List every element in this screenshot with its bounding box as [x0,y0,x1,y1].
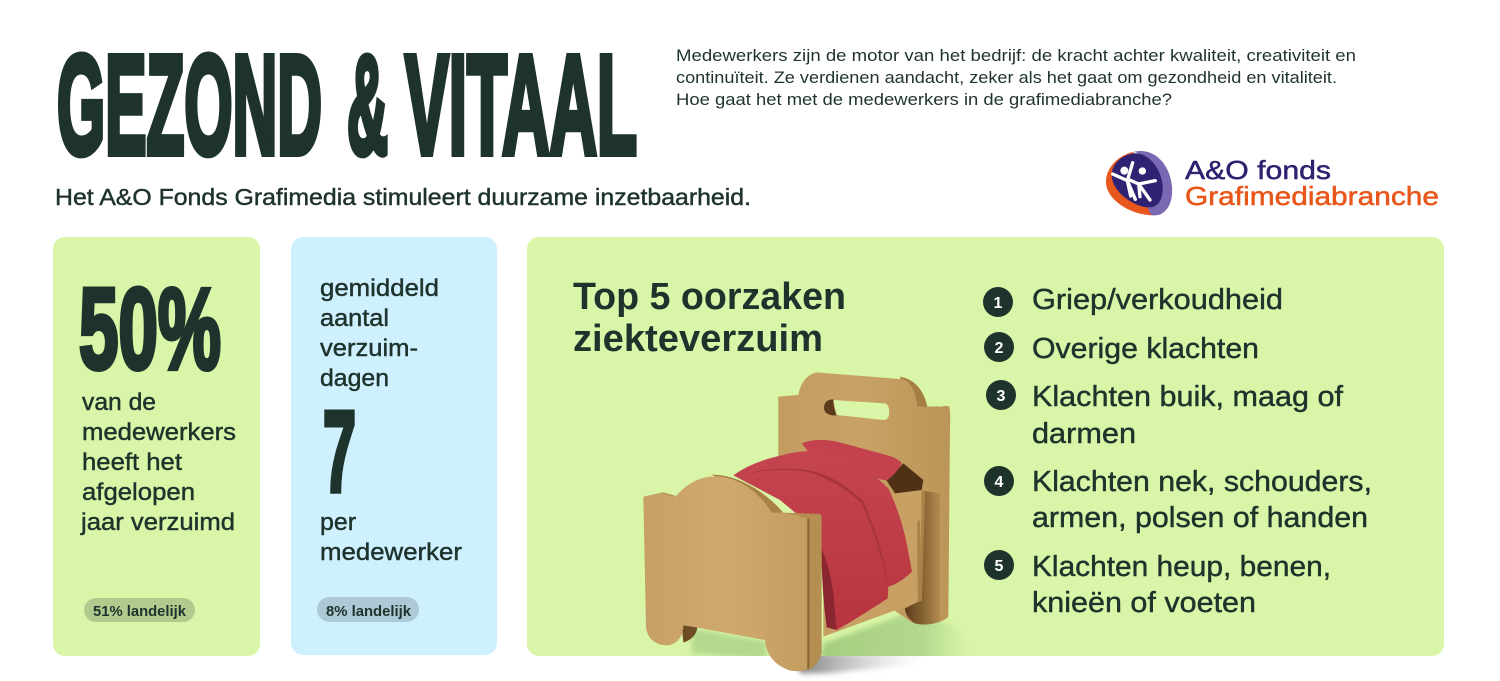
description top [320,275,439,392]
item 5: knieën of voeten [1032,587,1256,619]
subtitle: Het A&O Fonds Grafimedia stimuleert duurzame inzetbaarheid. [55,184,751,210]
panel heading [573,276,846,360]
stat: 50%: 50% [79,266,221,394]
intro text [676,46,1356,109]
panel: 50% verzuimd [53,237,260,656]
title: & [347,26,388,184]
stat description: medewerkers [82,419,236,446]
stat description [80,389,236,536]
item 4 [984,466,1372,534]
logo mark [1106,151,1172,215]
logo wordmark: Grafimediabranche [1185,181,1439,211]
item 3: 3 [997,388,1006,405]
item 1: 1 [994,295,1003,312]
item 4: armen, polsen of handen [1032,502,1368,534]
item 2: 2 [995,340,1004,357]
logo wordmark: A&O fonds [1185,155,1331,185]
text: VITAAL [405,26,637,184]
list: top 5 causes [983,284,1372,619]
panel: top 5 [527,237,1444,673]
stat: 7: 7 [323,388,356,516]
bed rail [823,463,925,637]
pill: 51% landelijk: 51% landelijk [93,603,187,620]
footboard [643,475,822,671]
item 3: darmen [1032,418,1136,450]
logo wordmark [1185,155,1439,211]
stat description: jaar verzuimd [80,509,235,536]
item 5 [984,550,1331,619]
description top: dagen [320,365,389,392]
stat description: van de [82,389,156,416]
floor shadow [692,613,970,673]
logo [1106,151,1439,215]
description top: gemiddeld [320,275,439,302]
intro text: Medewerkers zijn de motor van het bedrijf: de kracht achter kwaliteit, creativiteit en [676,46,1356,65]
intro text: continuïteit. Ze verdienen aandacht, zeker als het gaat om gezondheid en vitaliteit. [676,68,1337,87]
panel: verzuimdagen [291,237,497,655]
item 1: Griep/verkoudheid [1032,284,1283,316]
panel heading: Top 5 oorzaken [573,276,846,318]
pill: 8% landelijk: 8% landelijk [326,603,412,620]
description bottom: medewerker [320,539,462,566]
description top: aantal [320,305,389,332]
pillow [802,440,902,481]
description bottom: per [320,509,356,536]
illustration: cardboard bed [643,372,970,673]
panel heading: ziekteverzuim [573,318,823,360]
stat description: afgelopen [82,479,195,506]
pill: 51% landelijk [84,598,195,622]
item 5: Klachten heup, benen, [1032,551,1331,583]
item 2: Overige klachten [1032,333,1259,365]
stat description: heeft het [82,449,182,476]
intro text: Hoe gaat het met de medewerkers in de grafimediabranche? [676,90,1172,109]
item 4: Klachten nek, schouders, [1032,466,1372,498]
item 4: 4 [995,474,1004,491]
headboard [778,372,950,625]
item 3 [986,380,1344,450]
description top: verzuim- [320,335,418,362]
description bottom [320,509,462,566]
pill: 8% landelijk [317,597,419,622]
title: GEZOND [57,26,322,184]
item 3: Klachten buik, maag of [1032,381,1344,413]
blanket [733,451,912,630]
item 5: 5 [995,558,1004,575]
